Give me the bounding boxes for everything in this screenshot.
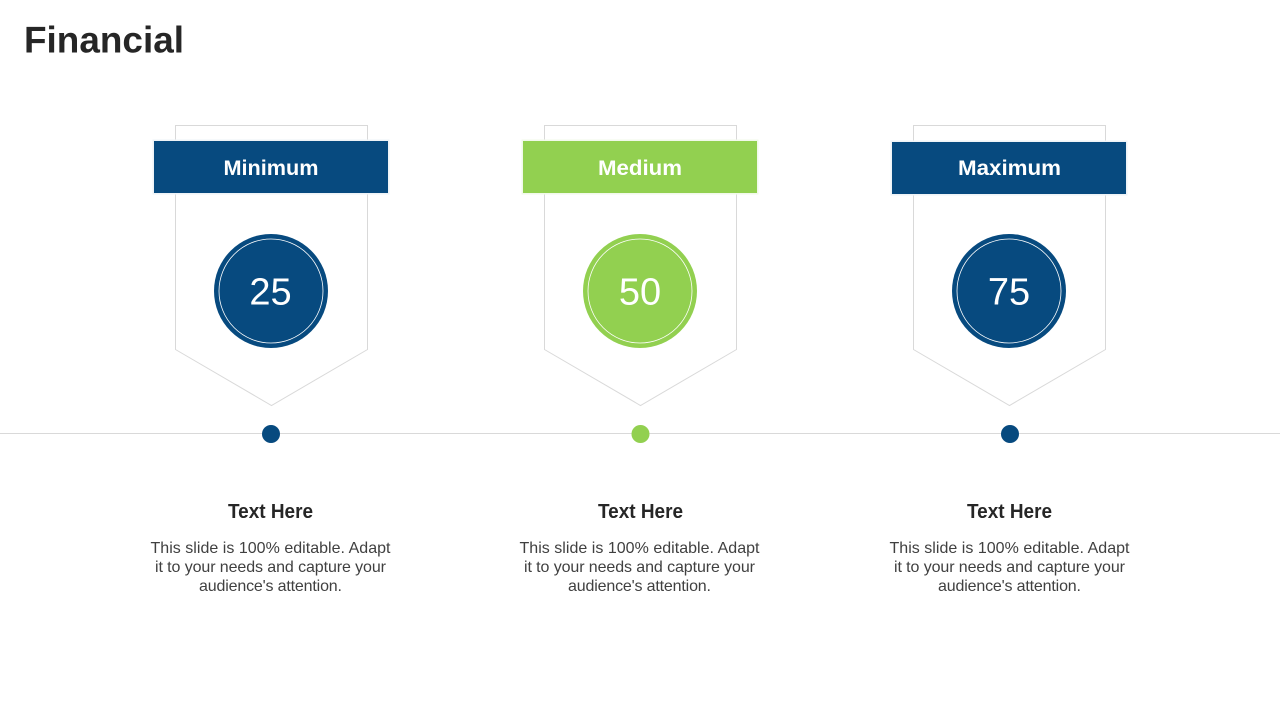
text block: minimum: This slide is 100% editable. Adapt xyxy=(150,540,391,557)
text block: medium xyxy=(520,501,760,595)
header: medium xyxy=(522,140,758,194)
title: Financial xyxy=(24,20,184,60)
text block: minimum: audience's attention. xyxy=(199,578,342,595)
panel: medium xyxy=(520,126,760,595)
text block: minimum xyxy=(150,501,391,595)
text block: maximum: Text Here xyxy=(967,501,1052,523)
text block: maximum: audience's attention. xyxy=(938,578,1081,595)
text block: medium: audience's attention. xyxy=(568,578,711,595)
panel: maximum xyxy=(890,126,1130,595)
text block: minimum: Text Here xyxy=(228,501,313,523)
pennant outline: maximum xyxy=(914,126,1106,406)
text block: maximum: This slide is 100% editable. Adapt xyxy=(890,540,1130,557)
header: minimum xyxy=(152,140,390,194)
text block: minimum: it to your needs and capture your xyxy=(155,559,387,576)
text block: medium: Text Here xyxy=(598,501,683,523)
timeline dot: minimum xyxy=(262,425,280,443)
value circle: 25 xyxy=(214,234,328,348)
timeline dot: maximum xyxy=(1001,425,1019,443)
value circle: 50 xyxy=(583,234,697,348)
header: maximum xyxy=(890,140,1128,196)
value circle: 25: 25 xyxy=(249,272,292,314)
pennant outline: medium xyxy=(544,126,736,406)
value circle: 75: 75 xyxy=(988,272,1030,314)
text block: maximum: it to your needs and capture your xyxy=(894,559,1126,576)
value circle: 50: 50 xyxy=(619,272,661,314)
header: medium: Medium xyxy=(598,157,682,180)
timeline dot: medium xyxy=(632,425,650,443)
header: maximum: Maximum xyxy=(958,157,1061,180)
text block: medium: it to your needs and capture your xyxy=(524,559,756,576)
text block: maximum xyxy=(890,501,1130,595)
pennant outline: minimum xyxy=(176,126,368,406)
value circle: 75 xyxy=(952,234,1066,348)
header: minimum: Minimum xyxy=(224,157,318,180)
panel: minimum xyxy=(150,126,391,595)
text block: medium: This slide is 100% editable. Adapt xyxy=(520,540,760,557)
